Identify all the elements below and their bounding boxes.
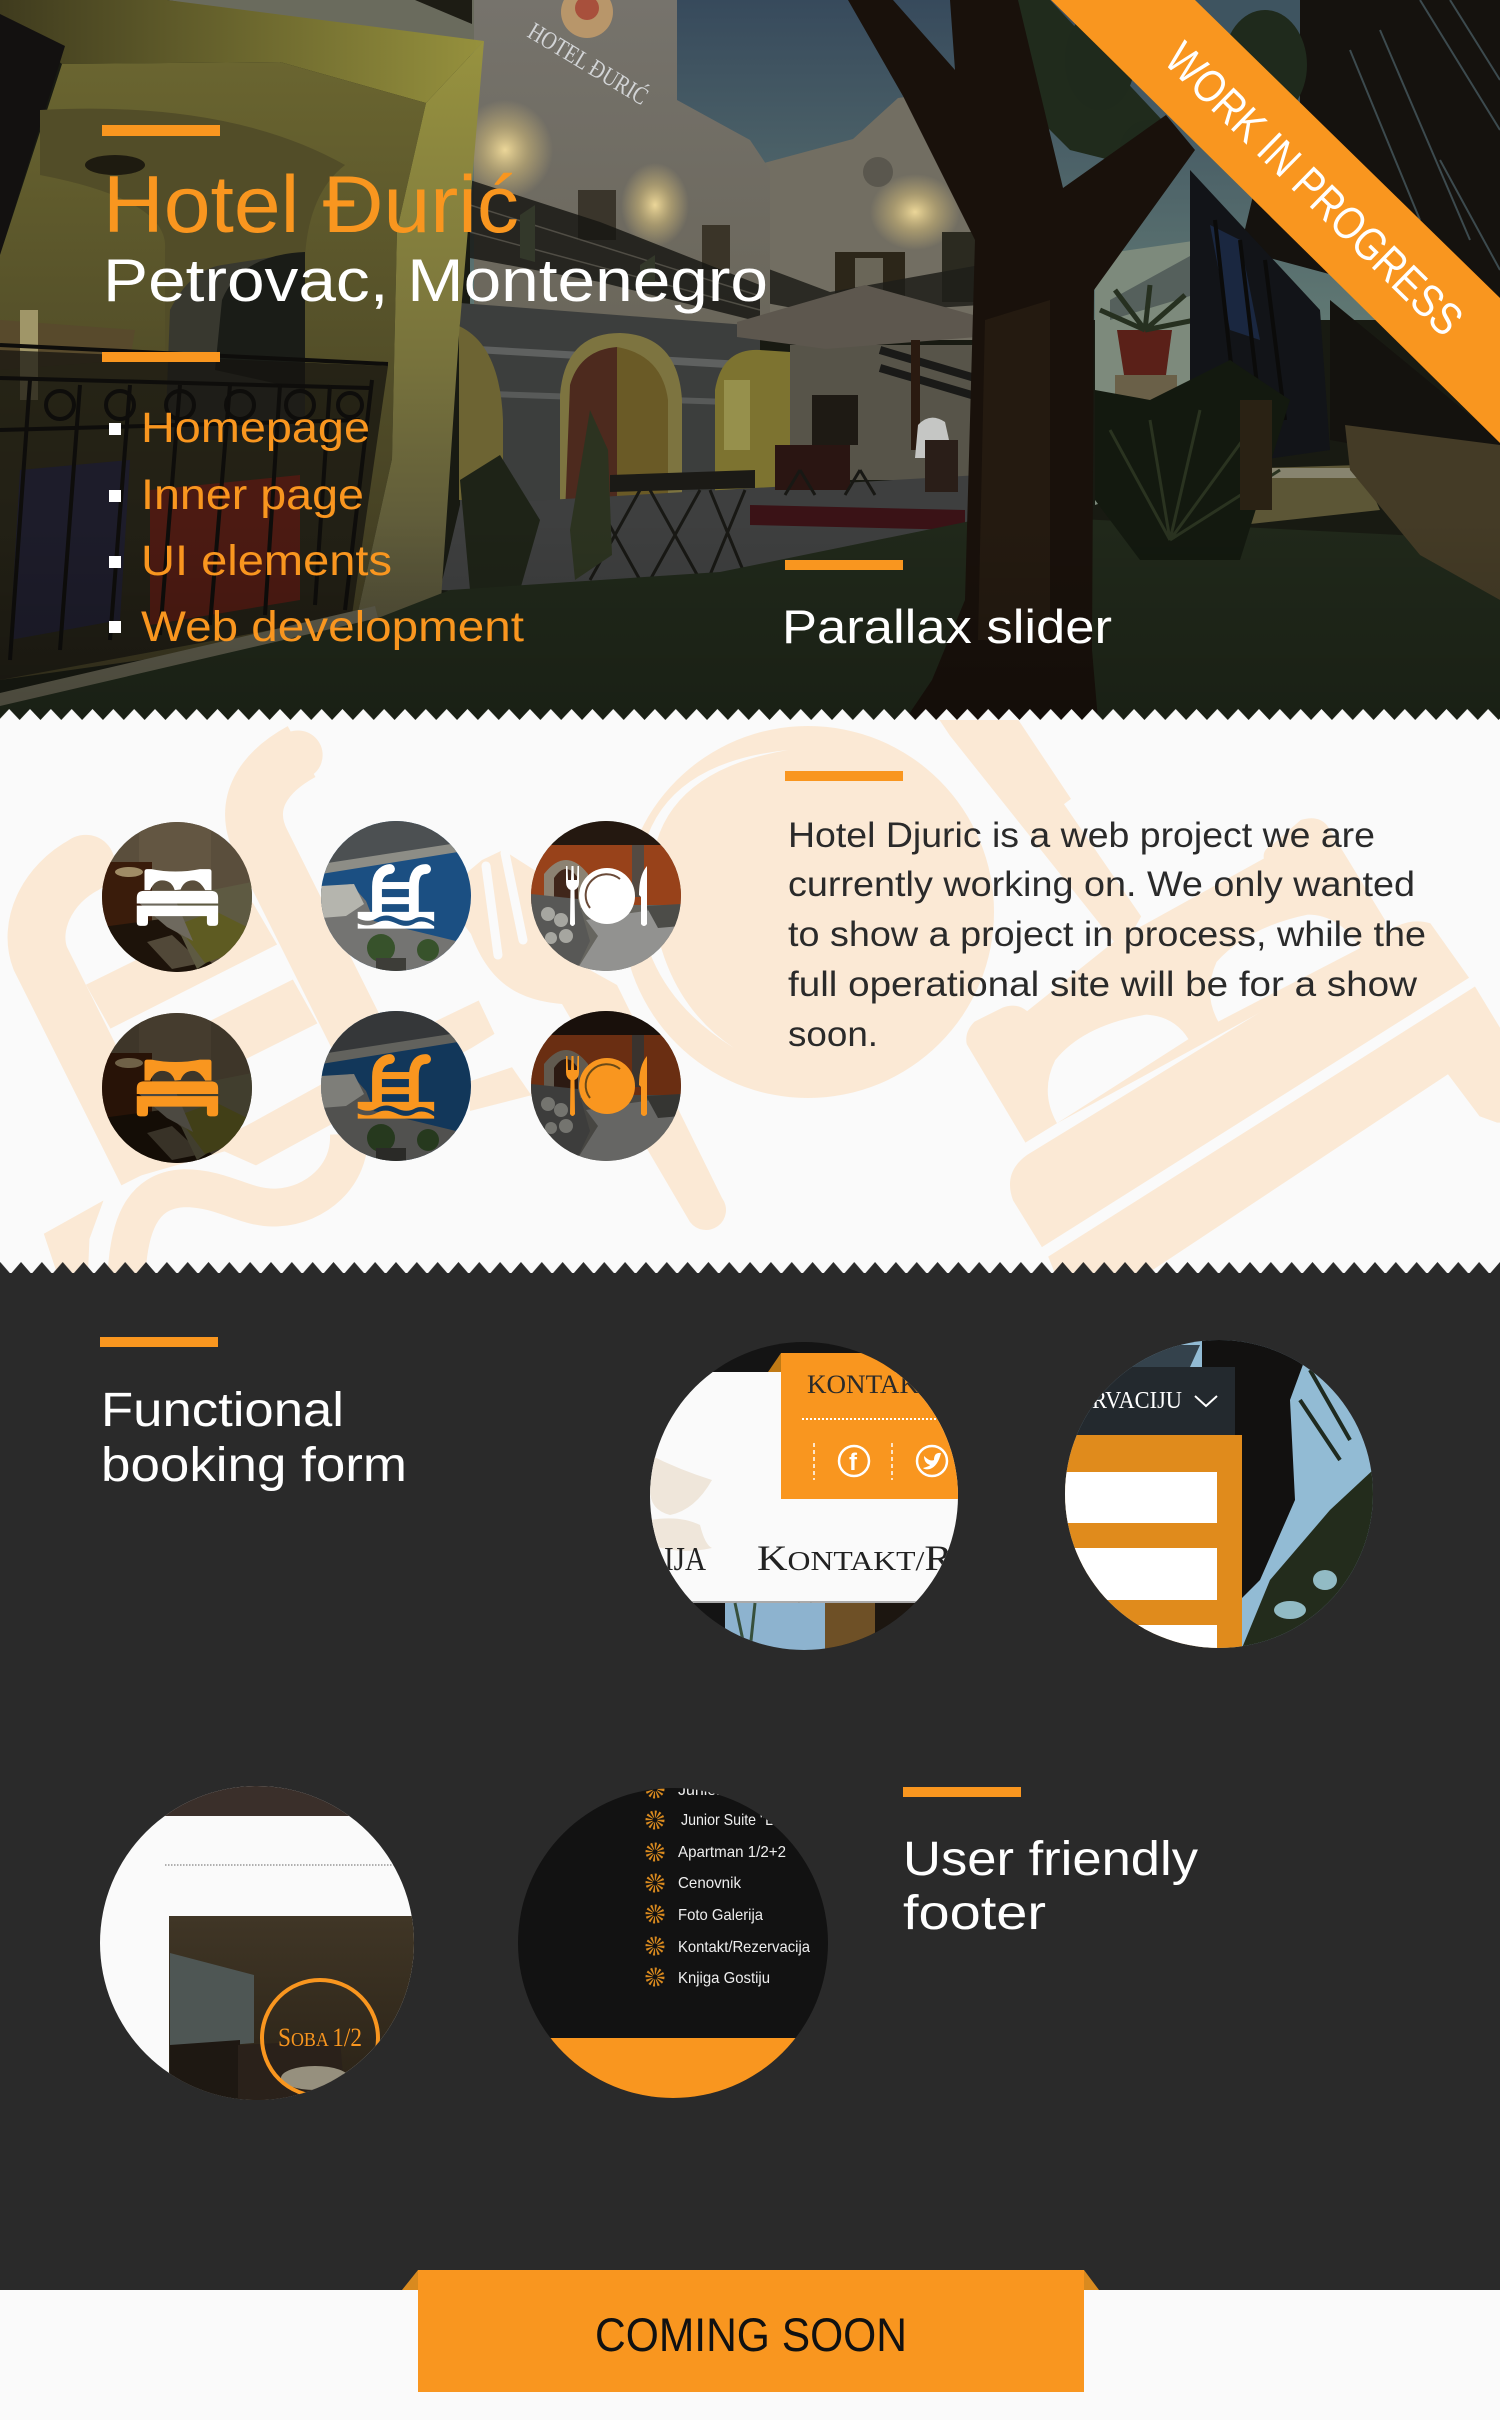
screenshot circle: footer menu: Cenovnik xyxy=(678,1875,742,1892)
screenshot circle: footer menu: Junior xyxy=(678,1782,722,1799)
icon: bed orange xyxy=(102,1013,252,1163)
footer heading: footer xyxy=(903,1887,1046,1940)
icon: pool ladder white xyxy=(321,821,471,971)
watermark: fork xyxy=(445,850,726,1230)
watermark: plate xyxy=(622,726,994,1098)
parallax slider label: Parallax slider xyxy=(782,600,1112,653)
screenshot circle: contact panel: f xyxy=(849,1449,858,1476)
services section background xyxy=(0,720,1500,1273)
banner: work in progress xyxy=(1051,0,1500,443)
booking form heading xyxy=(100,1337,407,1492)
icon: plate and cutlery white xyxy=(531,821,681,971)
screenshot circle: contact panel: IJA xyxy=(664,1541,706,1578)
hero title block: Hotel Đurić xyxy=(103,160,519,250)
parallax slider label xyxy=(785,560,1112,644)
screenshot circle: footer menu: Junior Suite "L xyxy=(681,1812,773,1829)
hero title block: Petrovac, Montenegro xyxy=(103,247,768,314)
icon: pool ladder orange xyxy=(321,1011,471,1161)
screenshot circle: contact panel: KONTAKT/ RE xyxy=(757,1538,972,1578)
booking form heading: Functional xyxy=(101,1384,344,1437)
intro paragraph: to show a project in process, while the xyxy=(788,915,1426,954)
right side garden and fence xyxy=(1000,0,1500,600)
torn edge between hero and services xyxy=(0,709,1500,720)
balcony railing in front of the arch xyxy=(0,345,388,708)
screenshot circle: inner page: SOBA 1/2 xyxy=(278,2023,362,2052)
feature list: Homepage xyxy=(141,404,370,452)
footer heading: User friendly xyxy=(903,1833,1198,1886)
icon grid xyxy=(102,821,681,1163)
coming soon ribbon xyxy=(402,2270,1099,2392)
hero section xyxy=(0,0,1500,720)
tree xyxy=(848,0,1195,720)
lawn xyxy=(0,515,1500,720)
hotel sign on facade: HOTEL ĐURIĆ xyxy=(523,17,653,111)
feature list xyxy=(109,404,524,651)
screenshot circle: footer menu: Apartman 1/2+2 xyxy=(678,1844,786,1861)
balcony railing upper xyxy=(470,180,760,322)
hero photo: hotel courtyard at dusk xyxy=(0,0,1500,720)
icon: plate and cutlery orange xyxy=(531,1011,681,1161)
feature list: UI elements xyxy=(141,537,392,585)
feature list: Inner page xyxy=(141,471,364,519)
coming soon ribbon: COMING SOON xyxy=(595,2308,907,2361)
intro paragraph xyxy=(785,771,1426,1054)
screenshot circle: reservation form xyxy=(1065,1340,1373,1650)
screenshot circle: contact panel: KONTAK xyxy=(807,1370,919,1399)
hero title block xyxy=(102,125,768,362)
yellow arch and pillar foreground xyxy=(0,0,484,680)
footer heading xyxy=(903,1787,1198,1940)
screenshot circle: footer menu xyxy=(518,1782,828,2098)
intro paragraph: currently working on. We only wanted xyxy=(788,865,1415,904)
booking form heading: booking form xyxy=(101,1439,407,1492)
watermark icons xyxy=(36,720,1500,1281)
watermark: bed and knife xyxy=(939,720,1500,1274)
torn edge between services and dark section xyxy=(0,1262,1500,1274)
screenshot circle: contact panel xyxy=(650,1342,972,1650)
dark features section xyxy=(0,1273,1500,2290)
screenshot circle: reservation form: RVACIJU xyxy=(1092,1388,1182,1414)
screenshot circle: footer menu: Foto Galerija xyxy=(678,1907,763,1924)
intro paragraph: full operational site will be for a show xyxy=(788,965,1418,1004)
intro paragraph: Hotel Djuric is a web project we are xyxy=(788,816,1375,855)
feature list: Web development xyxy=(141,603,524,651)
screenshot circle: footer menu: Knjiga Gostiju xyxy=(678,1970,770,1987)
screenshot circle: footer menu: Kontakt/Rezervacija xyxy=(678,1939,810,1956)
screenshot circle: inner page xyxy=(100,1786,414,2100)
bottom section xyxy=(0,2290,1500,2420)
intro paragraph: soon. xyxy=(788,1015,878,1054)
watermark: pool ladder xyxy=(36,752,531,1281)
icon: bed white xyxy=(102,822,252,972)
